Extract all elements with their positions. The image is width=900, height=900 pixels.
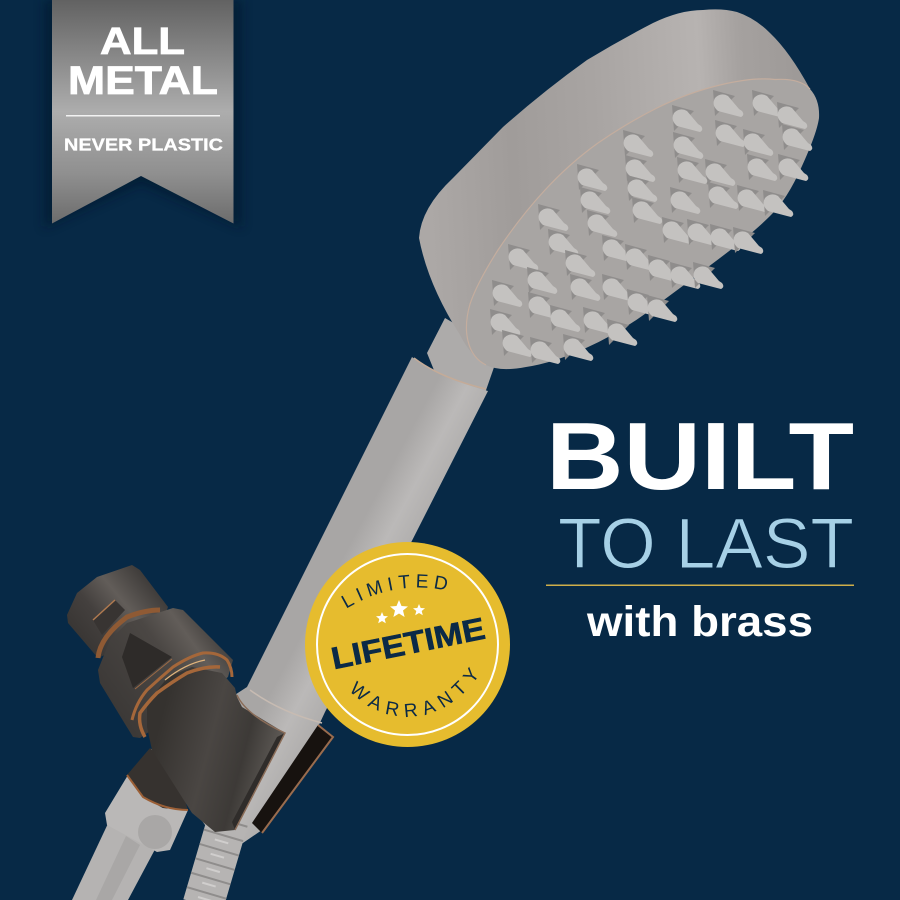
bracket top edge xyxy=(235,695,285,830)
bronze wall mount xyxy=(67,565,285,832)
top cap xyxy=(67,565,168,658)
copper ring upper xyxy=(98,610,160,658)
badge ring xyxy=(317,554,498,735)
mount body xyxy=(147,667,285,832)
rear clip plate xyxy=(252,725,333,833)
ribbon shape xyxy=(52,0,234,224)
ribbon shadow xyxy=(44,0,242,228)
all metal ribbon xyxy=(52,0,234,224)
left water pipe xyxy=(72,815,160,900)
shower head back shell xyxy=(419,9,819,365)
facet copper edge xyxy=(135,659,172,689)
handle neck xyxy=(427,318,500,396)
shower head face xyxy=(466,79,819,369)
bronze arm xyxy=(127,748,188,810)
collar facet xyxy=(122,633,172,688)
all text: ALL xyxy=(100,21,185,63)
bolt copper edge xyxy=(93,600,115,620)
spray nozzles xyxy=(490,90,812,364)
hex bolt xyxy=(93,600,125,635)
built: BUILT xyxy=(546,403,854,510)
limited text: LIMITED xyxy=(341,574,447,608)
ribbon divider xyxy=(66,115,220,116)
handle shaft xyxy=(150,357,488,845)
warranty text: WARRANTY xyxy=(352,666,477,718)
warranty badge xyxy=(305,542,510,747)
to last: TO LAST xyxy=(558,505,854,584)
badge disc xyxy=(305,542,510,747)
shower hand-held with head xyxy=(150,9,819,845)
headline block xyxy=(546,403,854,646)
metal text: METAL xyxy=(68,59,218,103)
lifetime text: LIFETIME xyxy=(328,611,488,676)
with brass: with brass xyxy=(586,598,813,646)
bracket flange xyxy=(232,733,285,830)
never plastic text: NEVER PLASTIC xyxy=(64,134,223,154)
copper ring outer xyxy=(132,653,232,720)
swivel collar xyxy=(98,608,233,738)
hex nut xyxy=(105,775,188,852)
stars xyxy=(376,600,425,623)
shaft ring near bracket xyxy=(250,690,322,723)
copper ring inner xyxy=(140,667,220,737)
gold rule xyxy=(546,584,854,586)
face rim highlight xyxy=(466,79,810,365)
copper edge on arm xyxy=(127,775,188,810)
ring highlight xyxy=(165,660,205,680)
copper collar line xyxy=(414,358,486,389)
flexible metal hose xyxy=(203,820,228,900)
